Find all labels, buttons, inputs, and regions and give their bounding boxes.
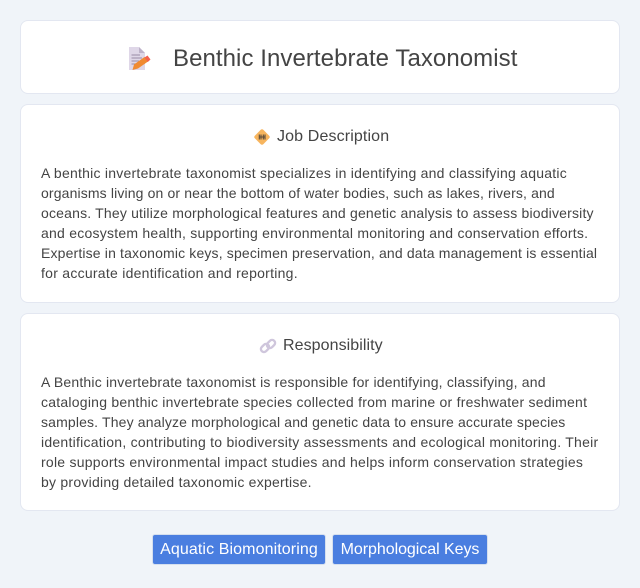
text block: job description: Expertise in taxonomic keys, specimen preservation, and data management is essential xyxy=(41,245,597,261)
tag: morphological keys xyxy=(332,534,488,565)
icon: chain link xyxy=(260,338,276,354)
text block: responsibility: identification, contributing to biodiversity assessments and ecological monitoring. Their xyxy=(41,434,598,450)
icon: document with pencil xyxy=(129,47,150,70)
icon: diamond sign xyxy=(254,129,270,145)
title: Benthic Invertebrate Taxonomist xyxy=(173,45,517,72)
text block: responsibility xyxy=(41,374,598,490)
heading: responsibility: Responsibility xyxy=(283,337,383,354)
tag: aquatic biomonitoring xyxy=(152,534,326,565)
text block: job description: and ecosystem health, supporting environmental monitoring and conservation efforts. xyxy=(41,225,588,241)
text block: responsibility: samples. They analyze morphological and genetic data to ensure accurate species xyxy=(41,414,565,430)
text block: responsibility: cataloging benthic invertebrate species collected from marine or freshwater sediment xyxy=(41,394,587,410)
text block: responsibility: A Benthic invertebrate taxonomist is responsible for identifying, classifying, and xyxy=(41,374,546,390)
panel: responsibility xyxy=(20,313,620,511)
tag: morphological keys: Morphological Keys xyxy=(341,541,479,558)
text block: job description: for accurate identification and reporting. xyxy=(41,265,298,281)
text block: job description xyxy=(41,165,597,281)
text block: job description: organisms living on or near the bottom of water bodies, such as lakes, rivers, and xyxy=(41,185,555,201)
panel: title card xyxy=(20,20,620,94)
text block: responsibility: by providing detailed taxonomic expertise. xyxy=(41,474,312,490)
text block: responsibility: role supports environmental impact studies and helps inform conservation strategies xyxy=(41,454,583,470)
text block: job description: A benthic invertebrate taxonomist specializes in identifying and classifying aquatic xyxy=(41,165,567,181)
tag: aquatic biomonitoring: Aquatic Biomonitoring xyxy=(160,541,318,558)
text block: job description: oceans. They utilize morphological features and genetic analysis to assess biodiversity xyxy=(41,205,594,221)
heading: job description: Job Description xyxy=(277,128,389,145)
panel: job description xyxy=(20,104,620,303)
